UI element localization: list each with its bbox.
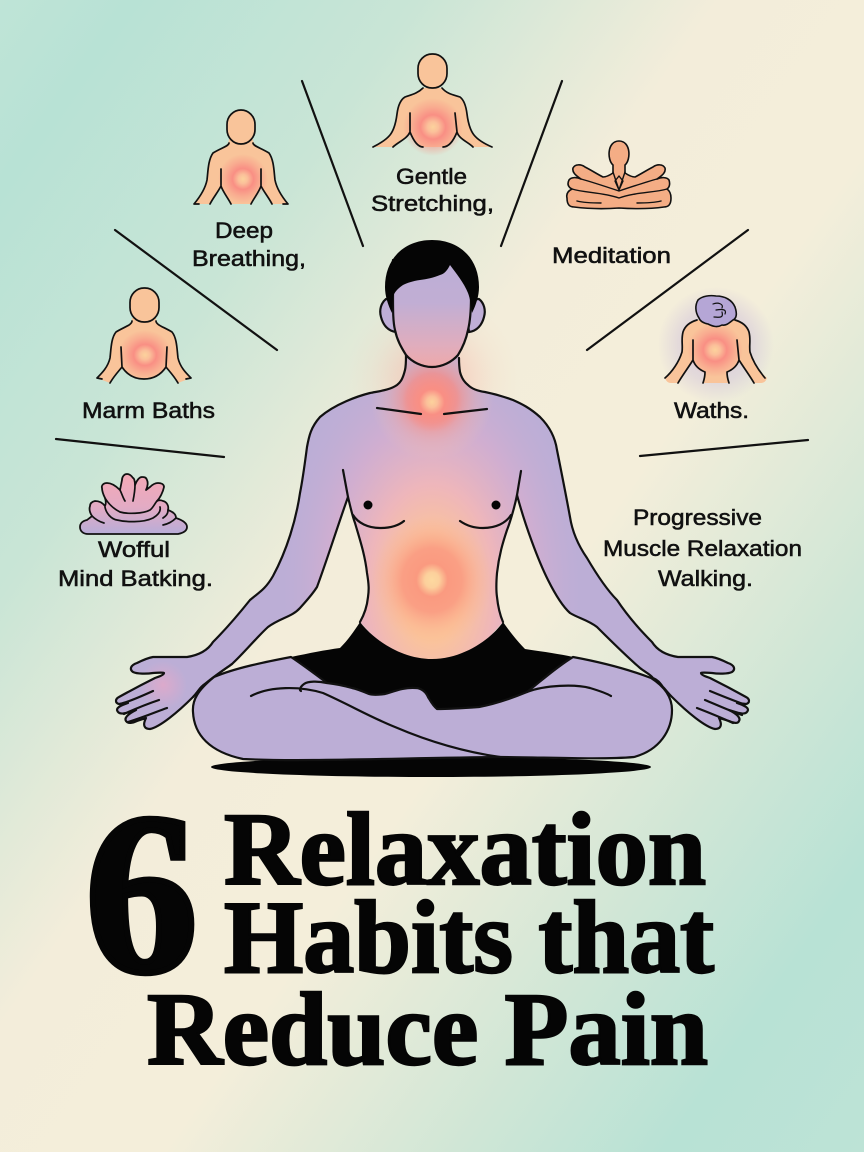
crossed legs [193,657,672,760]
label: Progressive Muscle Relaxation Walking: Muscle Relaxation [603,536,802,561]
divider lines around figure [56,81,808,457]
icon: warm baths figure [97,288,191,383]
chest lines [353,500,511,528]
label: Gentle Stretching [371,164,494,216]
title line 3: Reduce Pain [147,972,708,1087]
label: Marm Baths: Marm Baths [82,398,215,423]
label: Deep Breathing: Deep [215,218,273,243]
hand overlap redraw [193,664,232,697]
label: Gentle Stretching: Gentle [396,164,467,189]
central meditating figure [100,240,760,835]
big number 6: 6 [85,766,198,1021]
label: Progressive Muscle Relaxation Walking [603,505,802,591]
label: Progressive Muscle Relaxation Walking: Walking. [658,566,753,591]
label: Wofful Mind Batking [58,537,213,591]
icon: lotus mindful figure [80,474,187,534]
shorts [291,622,573,718]
upper body with pain glows [114,355,750,730]
neck glow halo [344,292,520,468]
title [85,766,714,1087]
icon: gentle stretching figure [373,54,492,156]
title line 2: Habits that [224,880,714,995]
icon: deep breathing figure [194,110,288,204]
label: Progressive Muscle Relaxation Walking: Progressive [633,505,762,530]
icon: walks figure with purple head [658,287,774,403]
hair [385,240,479,313]
label: Deep Breathing: Breathing, [192,246,306,271]
title line 1: Relaxation [224,792,706,907]
label: Deep Breathing [192,218,306,271]
label: Wofful Mind Batking: Wofful [98,537,170,562]
shadow under figure [211,757,651,777]
collarbones [377,408,487,414]
label: Wofful Mind Batking: Mind Batking. [58,566,213,591]
label: Waths: Waths. [674,398,749,423]
face [393,260,471,367]
label: Gentle Stretching: Stretching, [371,191,494,216]
label: Meditation: Meditation [552,243,671,268]
ears [380,299,485,332]
icon: meditation figure [567,141,671,209]
